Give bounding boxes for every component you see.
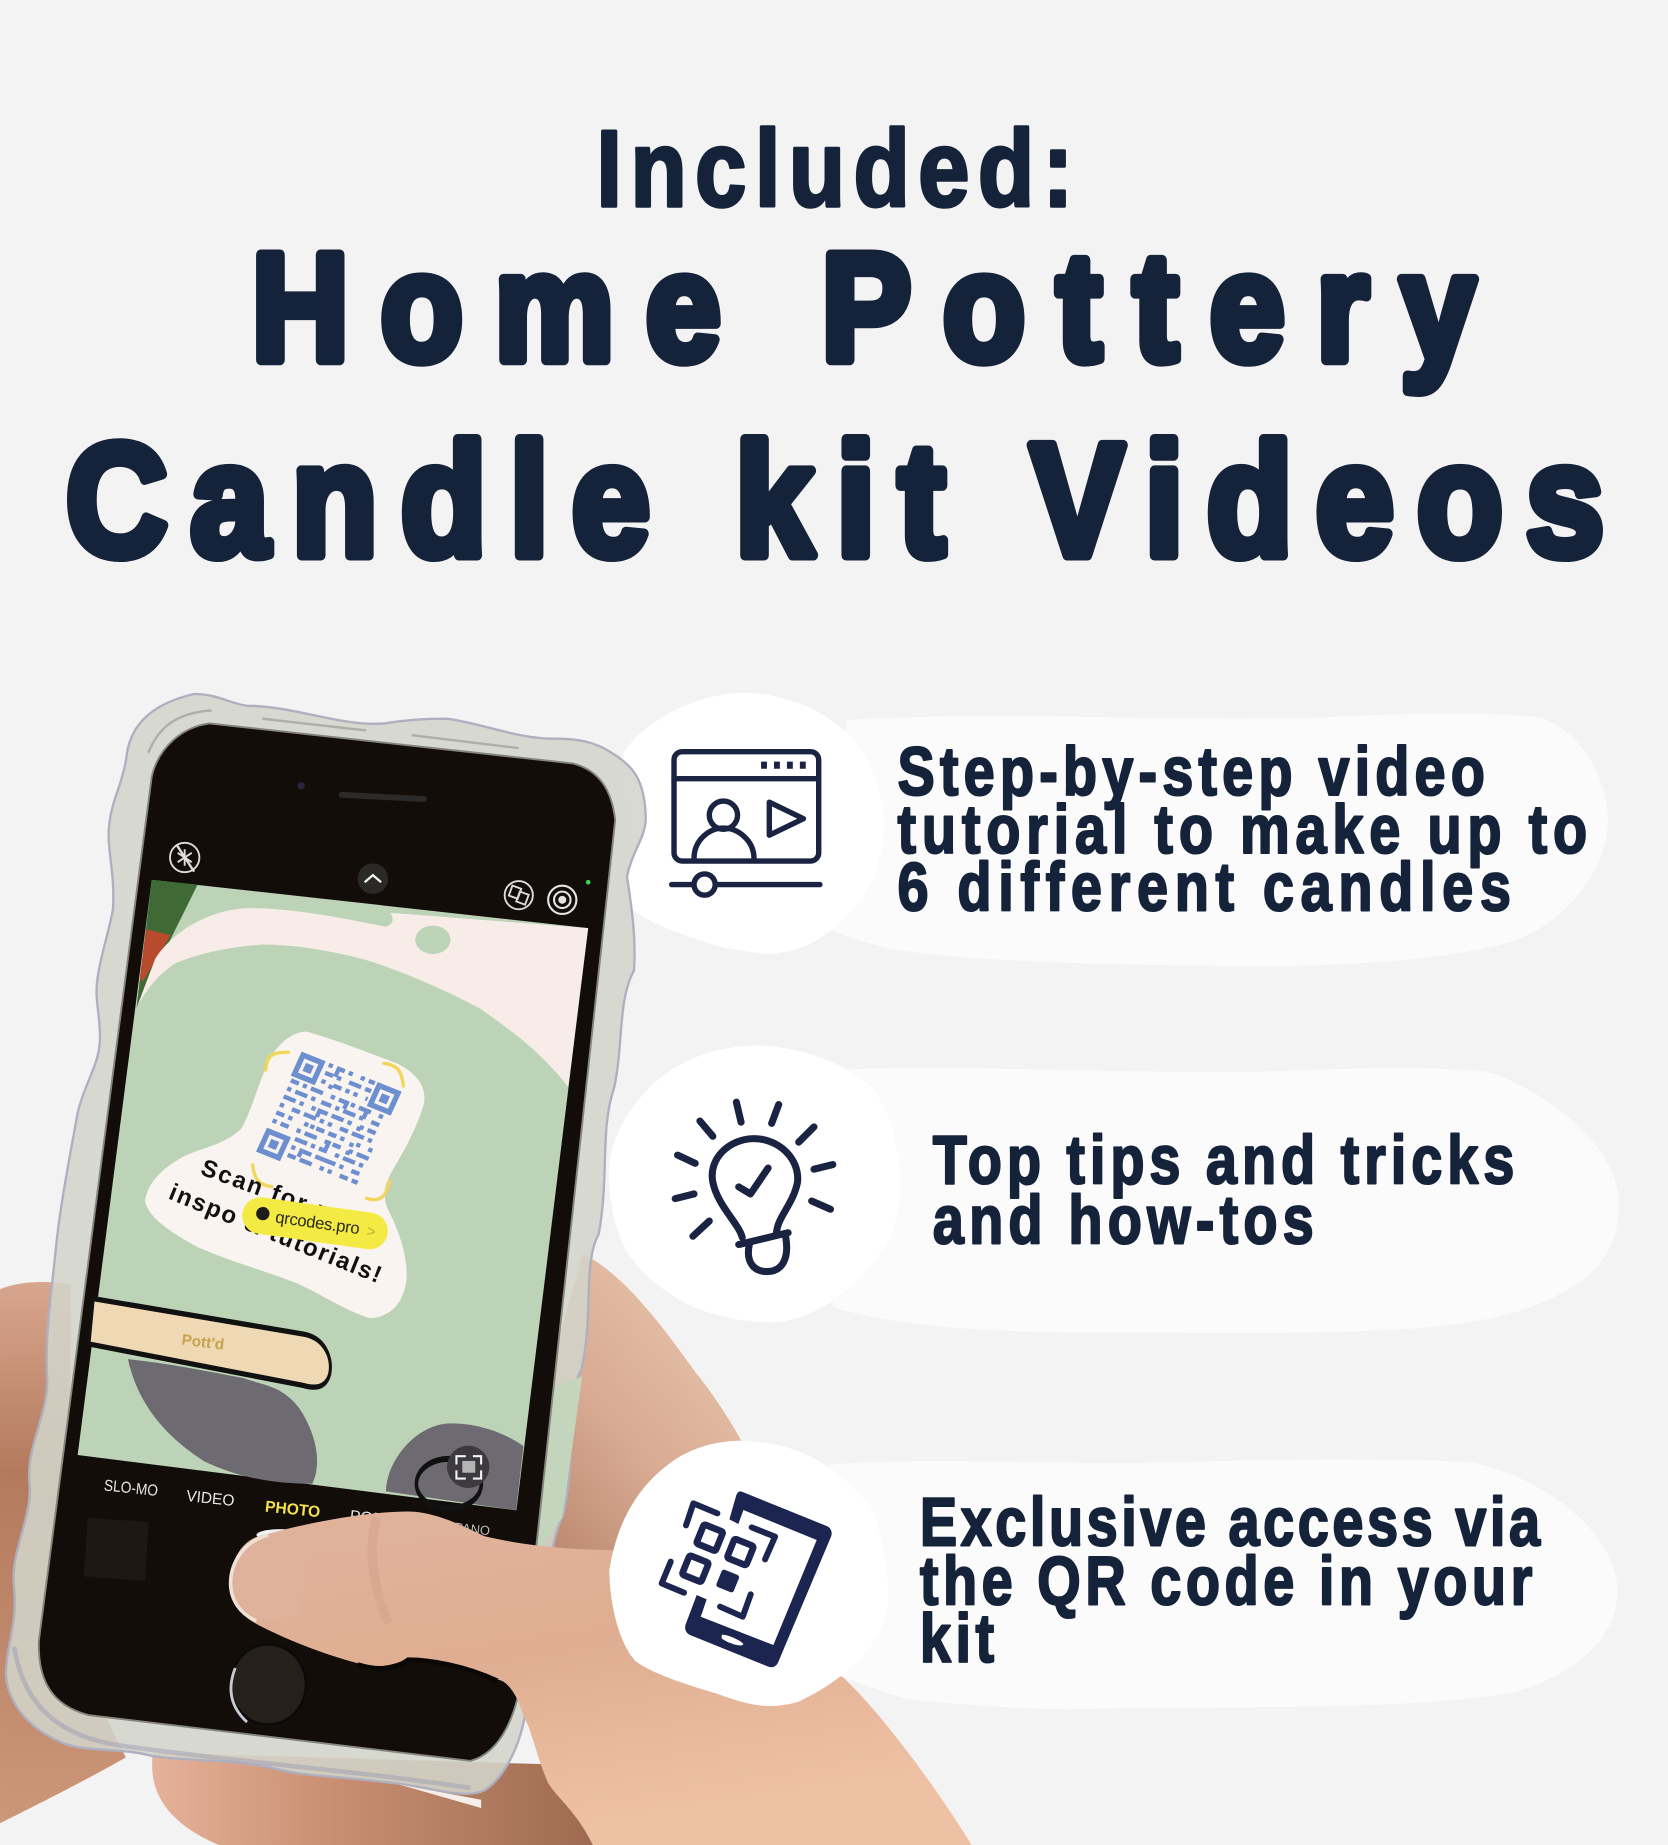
sticker shape	[145, 1032, 424, 1318]
camera: mode labels: SLO-MO	[103, 1477, 159, 1500]
icon: video tutorial	[672, 752, 820, 895]
text: video tutorial description: tutorial to make up to	[898, 793, 1587, 868]
photo: beige stick	[89, 1299, 330, 1387]
photo: pale curved band	[136, 908, 588, 1087]
case: highlight lines	[148, 710, 519, 753]
panel: tips pill	[833, 1068, 1619, 1333]
icon: light bulb	[675, 1102, 833, 1272]
thumb knuckle crease	[372, 1517, 388, 1623]
camera: layers icon	[505, 881, 533, 909]
text: video tutorial description	[898, 735, 1587, 926]
text: video tutorial description: 6 different candles	[898, 850, 1511, 926]
sticker sliver at hand	[399, 1784, 481, 1808]
thumb nail	[233, 1537, 320, 1619]
QR code	[259, 1054, 399, 1189]
yellow QR link: >	[366, 1223, 377, 1241]
phone: front camera	[298, 782, 305, 789]
title line: Included: Included:	[596, 109, 1073, 230]
text: QR access description	[920, 1485, 1541, 1677]
camera: mode labels: PANO	[454, 1520, 491, 1538]
hand shadow under thumb	[358, 1660, 498, 1681]
title	[66, 109, 1604, 589]
thumb nail rim	[231, 1535, 268, 1621]
phone: home button	[231, 1644, 306, 1724]
camera: mode labels: PHOTO	[264, 1499, 321, 1521]
text: tips description	[933, 1123, 1514, 1259]
phone: earpiece	[339, 792, 427, 802]
yellow QR link: qrcodes.pro	[274, 1208, 361, 1238]
camera: chevron control	[358, 863, 388, 894]
photo: grey blob right	[386, 1423, 523, 1510]
icon: QR code on tablet	[662, 1491, 832, 1667]
camera: live icon	[548, 886, 576, 914]
yellow QR link	[240, 1195, 390, 1252]
phone screen photo	[78, 880, 588, 1510]
camera: QR scan button	[447, 1446, 489, 1488]
text: QR access description: Exclusive access via	[920, 1485, 1541, 1561]
hand: left fingers	[0, 1282, 126, 1823]
hand: fingers right of phone	[494, 1254, 776, 1576]
case: blue inner shading	[14, 1647, 471, 1788]
camera: last photo thumbnail	[84, 1518, 149, 1581]
panel: QR pill	[823, 1459, 1617, 1709]
text: video tutorial description: Step-by-step video	[898, 735, 1485, 810]
panel: QR icon background	[609, 1441, 888, 1706]
photo: green dot	[415, 926, 451, 954]
camera: mode labels: PORTRAIT	[349, 1508, 430, 1533]
camera: shutter	[256, 1529, 303, 1541]
title line: Candle kit Videos: Candle kit Videos	[66, 411, 1604, 589]
camera: flash icon	[170, 843, 199, 872]
phone	[6, 694, 646, 1808]
camera: green dot	[586, 880, 591, 885]
photo elements	[89, 1299, 523, 1510]
photo: stick brand: Pott'd	[181, 1332, 225, 1354]
photo: dark ring	[416, 1459, 481, 1509]
text: tips description: Top tips and tricks	[933, 1123, 1514, 1199]
panel: video tutorial pill	[823, 714, 1608, 966]
text: QR access description: the QR code in your	[920, 1544, 1532, 1620]
case: mint reflection	[536, 1376, 582, 1553]
photo: grey blob left	[128, 1359, 317, 1484]
camera: mode labels	[103, 1477, 491, 1538]
phone case	[6, 694, 646, 1794]
sticker caption: Scan for more	[197, 1154, 382, 1243]
camera: mode labels: VIDEO	[185, 1488, 235, 1510]
sticker caption: inspo & tutorials!	[165, 1179, 385, 1289]
phone body	[39, 723, 615, 1761]
text: tips description: and how-tos	[933, 1183, 1314, 1259]
hand: lower finger	[152, 1753, 600, 1845]
text: QR access description: kit	[920, 1602, 994, 1677]
title line: Home Pottery: Home Pottery	[252, 222, 1475, 393]
photo: QR sticker group	[145, 1032, 424, 1318]
QR scan corners	[253, 1052, 403, 1200]
panel: tips icon background	[609, 1046, 900, 1322]
panel: video icon background	[623, 693, 884, 954]
photo: background corner	[136, 880, 198, 1008]
hand: thumb and palm over phone	[229, 1512, 972, 1845]
